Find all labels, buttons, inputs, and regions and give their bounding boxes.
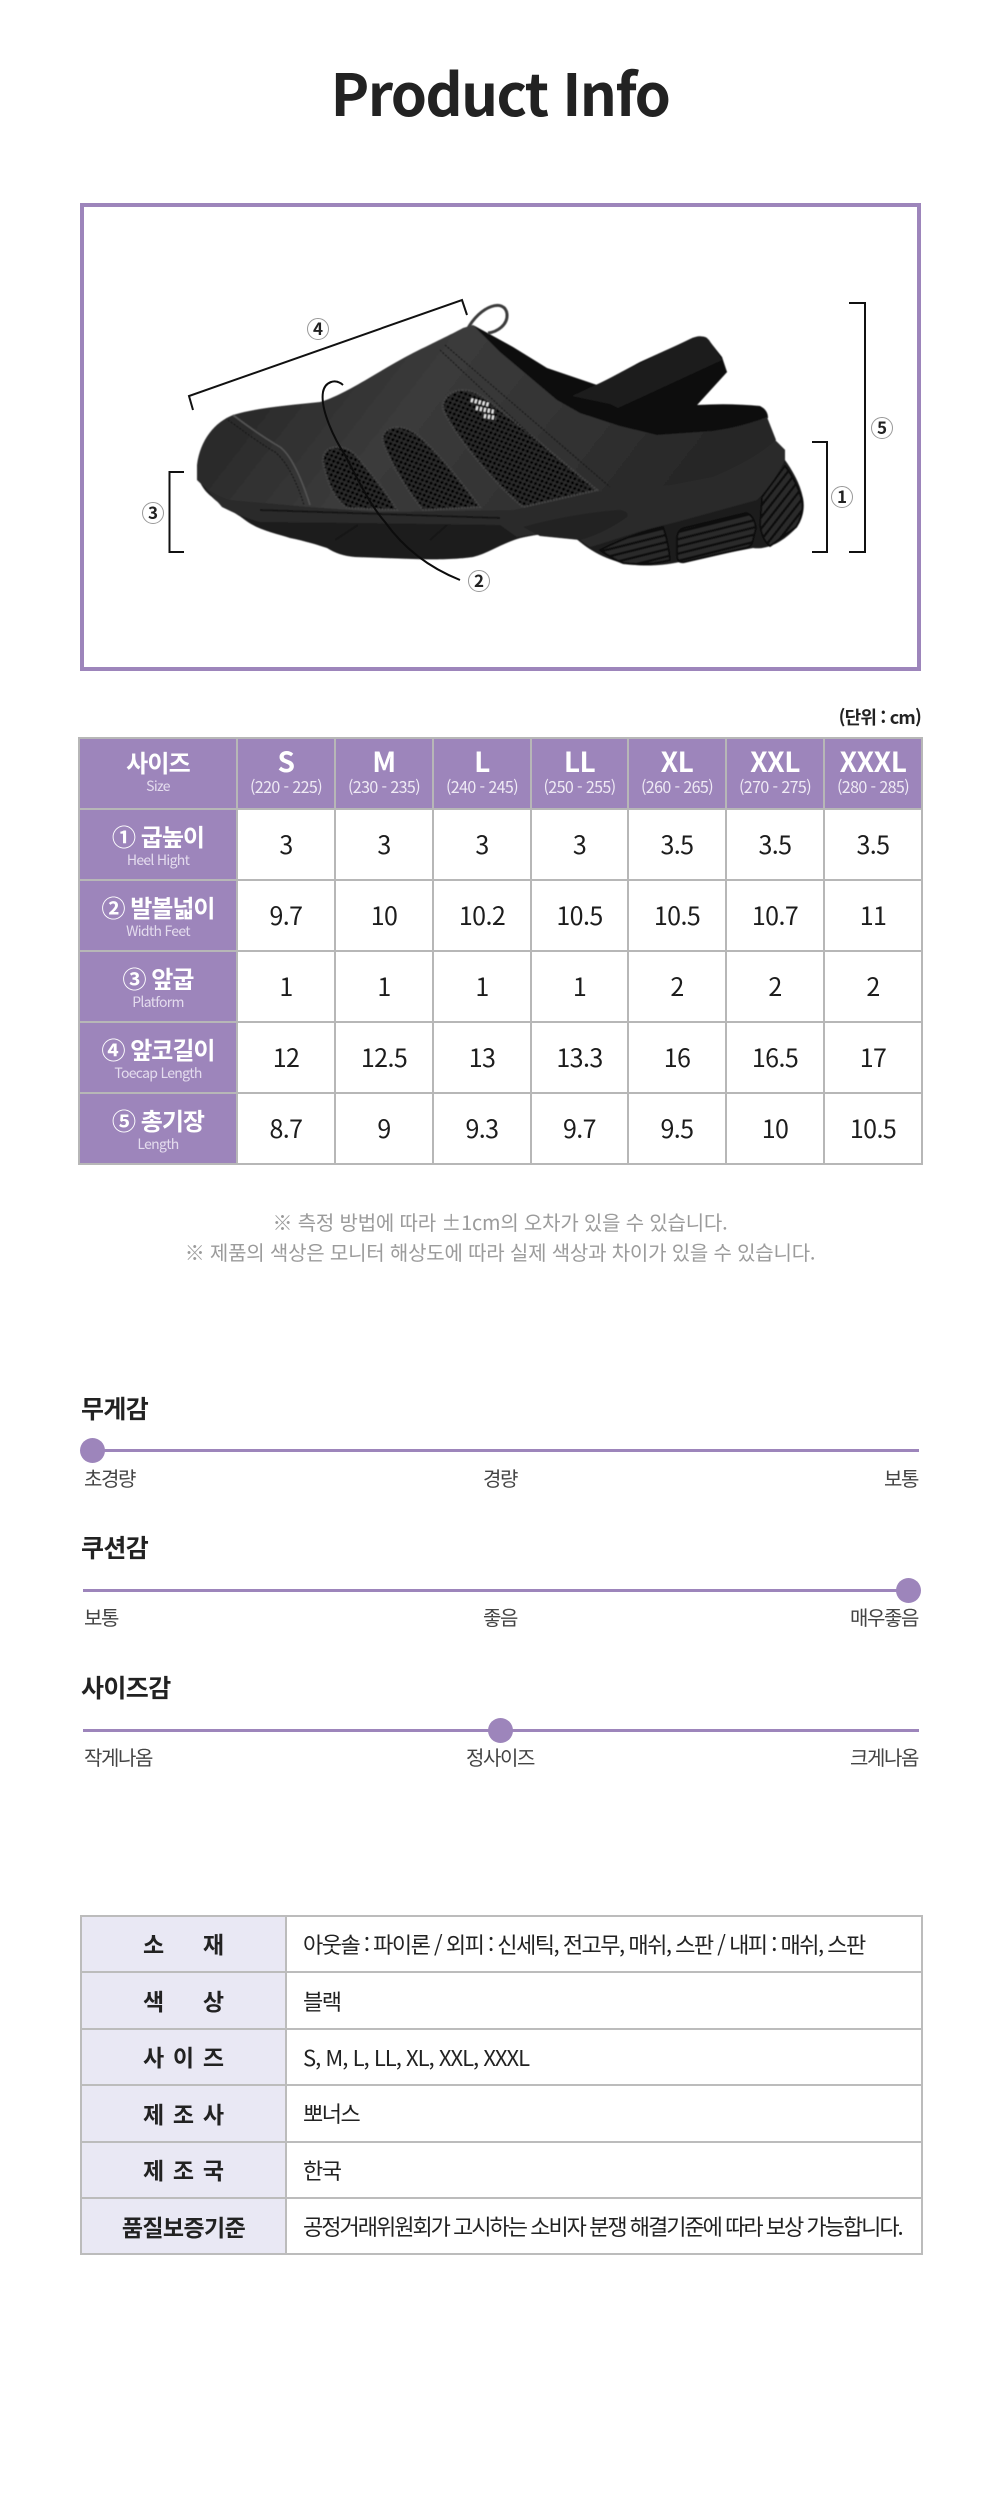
row: width feet: 11 — [860, 897, 886, 933]
row: heel height: 3 — [279, 826, 293, 862]
row: toecap length: 16.5 — [752, 1039, 798, 1075]
slider: weight — [80, 1390, 919, 1492]
spec row: manufacturer: 제 조 사 — [143, 2096, 224, 2130]
measurement notes: ※ 측정 방법에 따라 ±1cm의 오차가 있을 수 있습니다. — [272, 1207, 728, 1236]
size table header row: LL — [564, 740, 595, 780]
slider: size fit: 정사이즈 — [466, 1742, 534, 1771]
size table header row: (240 - 245) — [446, 774, 518, 798]
spec row: quality guarantee: 품질보증기준 — [122, 2209, 245, 2243]
row: heel height: 3 — [573, 826, 586, 862]
spec row: color: 색 상 — [143, 1983, 224, 2017]
size table header row: (220 - 225) — [250, 774, 322, 798]
row: heel height: 3.5 — [661, 826, 693, 862]
measurement notes — [185, 1207, 815, 1266]
row: platform: 2 — [670, 968, 684, 1004]
bracket 4: toecap length — [189, 300, 467, 410]
size table header row: Size — [146, 776, 170, 796]
leather upper — [197, 325, 776, 512]
row: toecap length: 12 — [273, 1039, 299, 1075]
spec row: sizes: 사 이 즈 — [143, 2039, 224, 2073]
row: platform: 2 — [768, 968, 782, 1004]
size table header row: XXXL — [840, 740, 906, 780]
spec row: material: 아웃솔 : 파이론 / 외피 : 신세틱, 전고무, 매쉬, 스판 / 내피 : 매쉬, 스판 — [303, 1928, 865, 1960]
spec row: material: 소 재 — [143, 1926, 224, 1960]
spec row: quality guarantee — [82, 2199, 902, 2253]
slider heading: 사이즈감 — [81, 1669, 171, 1705]
measurement notes: ※ 제품의 색상은 모니터 해상도에 따라 실제 색상과 차이가 있을 수 있습니다. — [185, 1237, 815, 1266]
size table header row: S — [278, 740, 294, 780]
marker 2 — [468, 567, 490, 592]
row: width feet: 9.7 — [270, 897, 302, 933]
row: heel height: 3.5 — [759, 826, 791, 862]
spec row: color — [82, 1973, 340, 2028]
outsole — [197, 440, 804, 566]
midsole detail — [523, 510, 628, 540]
row: platform: 1 — [377, 968, 391, 1004]
row: toecap length — [80, 1023, 886, 1092]
curve 2: width feet — [323, 381, 490, 592]
row: width feet: 10 — [371, 897, 397, 933]
size table header row: XL — [661, 740, 693, 780]
slider track — [83, 1729, 919, 1732]
spec row: sizes — [82, 2030, 530, 2084]
spec row: manufacturer — [82, 2086, 360, 2141]
stitching — [440, 345, 610, 491]
spec row: country of origin: 제 조 국 — [143, 2152, 224, 2186]
row: width feet — [80, 881, 886, 950]
row: toecap length: 17 — [860, 1039, 886, 1075]
size table header row — [80, 739, 921, 1163]
row: platform: 1 — [279, 968, 293, 1004]
slider marker — [896, 1578, 920, 1603]
row: heel height — [80, 810, 889, 879]
row: heel height: 3 — [377, 826, 391, 862]
row: length — [80, 1094, 896, 1163]
mesh panels — [323, 447, 397, 510]
bracket 3: platform — [142, 472, 184, 552]
marker 3: 3 — [148, 499, 158, 524]
slider labels: 초경량 — [84, 1463, 135, 1492]
size table — [78, 737, 923, 1165]
row: width feet: 10.7 — [752, 897, 798, 933]
row: heel height: Heel Hight — [127, 850, 189, 870]
marker 5: 5 — [877, 414, 887, 439]
row: length: 9.5 — [661, 1110, 693, 1146]
shoe illustration — [197, 305, 804, 566]
size table header row: (230 - 235) — [348, 774, 420, 798]
spec row: quality guarantee: 공정거래위원회가 고시하는 소비자 분쟁 해결기준에 따라 보상 가능합니다. — [303, 2210, 902, 2242]
row: platform: ③ 앞굽 — [123, 960, 193, 994]
size table header row: (250 - 255) — [543, 774, 616, 798]
row: width feet: 10.5 — [556, 897, 603, 933]
marker 4: 4 — [313, 315, 323, 340]
slider track — [83, 1589, 919, 1592]
size table header row: M — [372, 740, 396, 780]
row: width feet: 10.2 — [459, 897, 505, 933]
row: length: Length — [137, 1134, 179, 1154]
title: Product Info — [331, 49, 669, 133]
inner collar — [473, 325, 768, 438]
spec row: material — [82, 1917, 902, 2253]
spec row: sizes: S, M, L, LL, XL, XXL, XXXL — [303, 2041, 529, 2073]
size table header row: 사이즈 — [126, 744, 190, 778]
spec row: country of origin — [82, 2143, 341, 2197]
slider: cushioning: 매우좋음 — [850, 1602, 918, 1631]
row: platform: 2 — [866, 968, 880, 1004]
row: toecap length: 13.3 — [556, 1039, 603, 1075]
lace loop — [467, 305, 507, 333]
size table header row: (260 - 265) — [641, 774, 713, 798]
row: width feet: Width Feet — [126, 920, 190, 940]
row: length: 9.7 — [563, 1110, 596, 1146]
spec row: manufacturer: 뽀너스 — [303, 2097, 359, 2129]
midsole — [197, 440, 785, 547]
row: length: ⑤ 총기장 — [112, 1102, 204, 1136]
product specification table — [80, 1915, 923, 2255]
slider: weight: 보통 — [884, 1463, 918, 1492]
panel: shoe measurement diagram — [80, 203, 921, 671]
slider: size fit — [81, 1669, 919, 1771]
row: toecap length: 12.5 — [361, 1039, 407, 1075]
marker 2: 2 — [474, 567, 484, 592]
marker 1: 1 — [837, 483, 847, 508]
slider labels: 보통 — [84, 1602, 118, 1631]
bracket 5: length — [849, 303, 892, 552]
slider track — [83, 1449, 919, 1452]
slider labels: 작게나옴 — [84, 1742, 152, 1771]
marker 4 — [308, 315, 328, 340]
row: toecap length: ④ 앞코길이 — [101, 1030, 215, 1066]
spec row: country of origin: 한국 — [303, 2154, 340, 2186]
mesh logo — [471, 400, 496, 418]
size table header row: (280 - 285) — [837, 774, 909, 798]
row: width feet: ② 발볼넓이 — [101, 888, 215, 924]
row: toecap length: Toecap Length — [114, 1062, 202, 1082]
row: heel height: ① 굽높이 — [112, 818, 204, 852]
slider heading: 쿠션감 — [81, 1529, 148, 1565]
slider heading: 무게감 — [81, 1390, 148, 1426]
slider: weight: 경량 — [483, 1463, 517, 1492]
bracket 1: heel height — [812, 442, 852, 552]
unit note: (단위 : cm) — [839, 704, 921, 730]
row: width feet: 10.5 — [654, 897, 700, 933]
row: toecap length: 13 — [469, 1039, 495, 1075]
slider marker — [488, 1718, 513, 1743]
slider: cushioning — [81, 1529, 921, 1631]
heel strap — [572, 336, 722, 408]
row: platform — [80, 952, 880, 1021]
row: length: 9.3 — [466, 1110, 498, 1146]
row: platform: 1 — [475, 968, 489, 1004]
row: length: 9 — [377, 1110, 391, 1146]
row: platform: 1 — [573, 968, 586, 1004]
row: heel height: 3.5 — [857, 826, 889, 862]
row: length: 10.5 — [850, 1110, 896, 1146]
slider: size fit: 크게나옴 — [850, 1742, 918, 1771]
row: length: 8.7 — [270, 1110, 302, 1146]
size table header row: XXL — [750, 740, 800, 780]
row: toecap length: 16 — [664, 1039, 690, 1075]
size table header row: (270 - 275) — [739, 774, 811, 798]
row: platform: Platform — [132, 992, 184, 1012]
spec row: color: 블랙 — [303, 1985, 340, 2017]
row: heel height: 3 — [475, 826, 489, 862]
slider: cushioning: 좋음 — [483, 1602, 517, 1631]
row: length: 10 — [762, 1110, 788, 1146]
size table header row: L — [474, 740, 490, 780]
heel tread pads — [600, 527, 670, 564]
slider marker — [80, 1438, 104, 1463]
marker 5 — [872, 414, 892, 439]
